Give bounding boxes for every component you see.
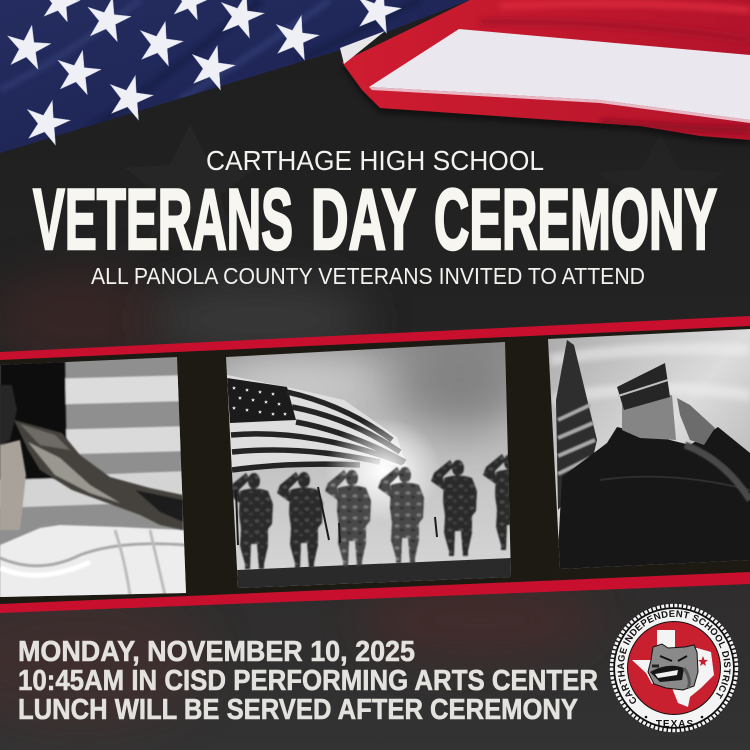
event details xyxy=(18,636,598,726)
time and location: 10:45AM IN CISD PERFORMING ARTS CENTER xyxy=(18,665,598,697)
saluting hand xyxy=(677,398,715,445)
title xyxy=(33,172,717,268)
waving flag xyxy=(227,375,407,473)
jacket xyxy=(557,427,750,570)
head and cap xyxy=(622,395,676,440)
ground xyxy=(237,558,511,590)
small flag xyxy=(556,340,597,510)
flag: blue star field xyxy=(0,0,470,153)
photo: saluting hand xyxy=(0,350,190,600)
seal lettering: TEXAS xyxy=(656,719,694,730)
star xyxy=(698,656,708,666)
subheading: invitation: ALL PANOLA COUNTY VETERANS INVITED TO ATTEND xyxy=(91,263,645,289)
photo strip backing xyxy=(0,326,750,606)
flag: red and white stripes xyxy=(340,0,750,145)
icon: flag stars xyxy=(3,0,405,147)
lunch note: LUNCH WILL BE SERVED AFTER CEREMONY xyxy=(18,694,578,726)
logo: Carthage ISD seal xyxy=(610,604,738,732)
seal dots xyxy=(645,716,703,718)
photo: soldiers saluting flag xyxy=(226,342,511,588)
seal lettering: CARTHAGE INDEPENDENT SCHOOL DISTRICT xyxy=(618,610,731,704)
soldiers xyxy=(227,454,529,569)
photo: veteran saluting xyxy=(540,325,750,575)
title: VETERANS xyxy=(33,172,293,268)
heading: school name: CARTHAGE HIGH SCHOOL xyxy=(206,145,544,176)
red band top xyxy=(0,316,750,360)
date: MONDAY, NOVEMBER 10, 2025 xyxy=(18,636,415,668)
bulldog head xyxy=(648,644,698,690)
title: DAY xyxy=(311,172,416,268)
hand and arm xyxy=(0,385,183,530)
rifles xyxy=(236,487,437,545)
Texas outline xyxy=(632,630,714,707)
red band bottom xyxy=(0,572,750,613)
